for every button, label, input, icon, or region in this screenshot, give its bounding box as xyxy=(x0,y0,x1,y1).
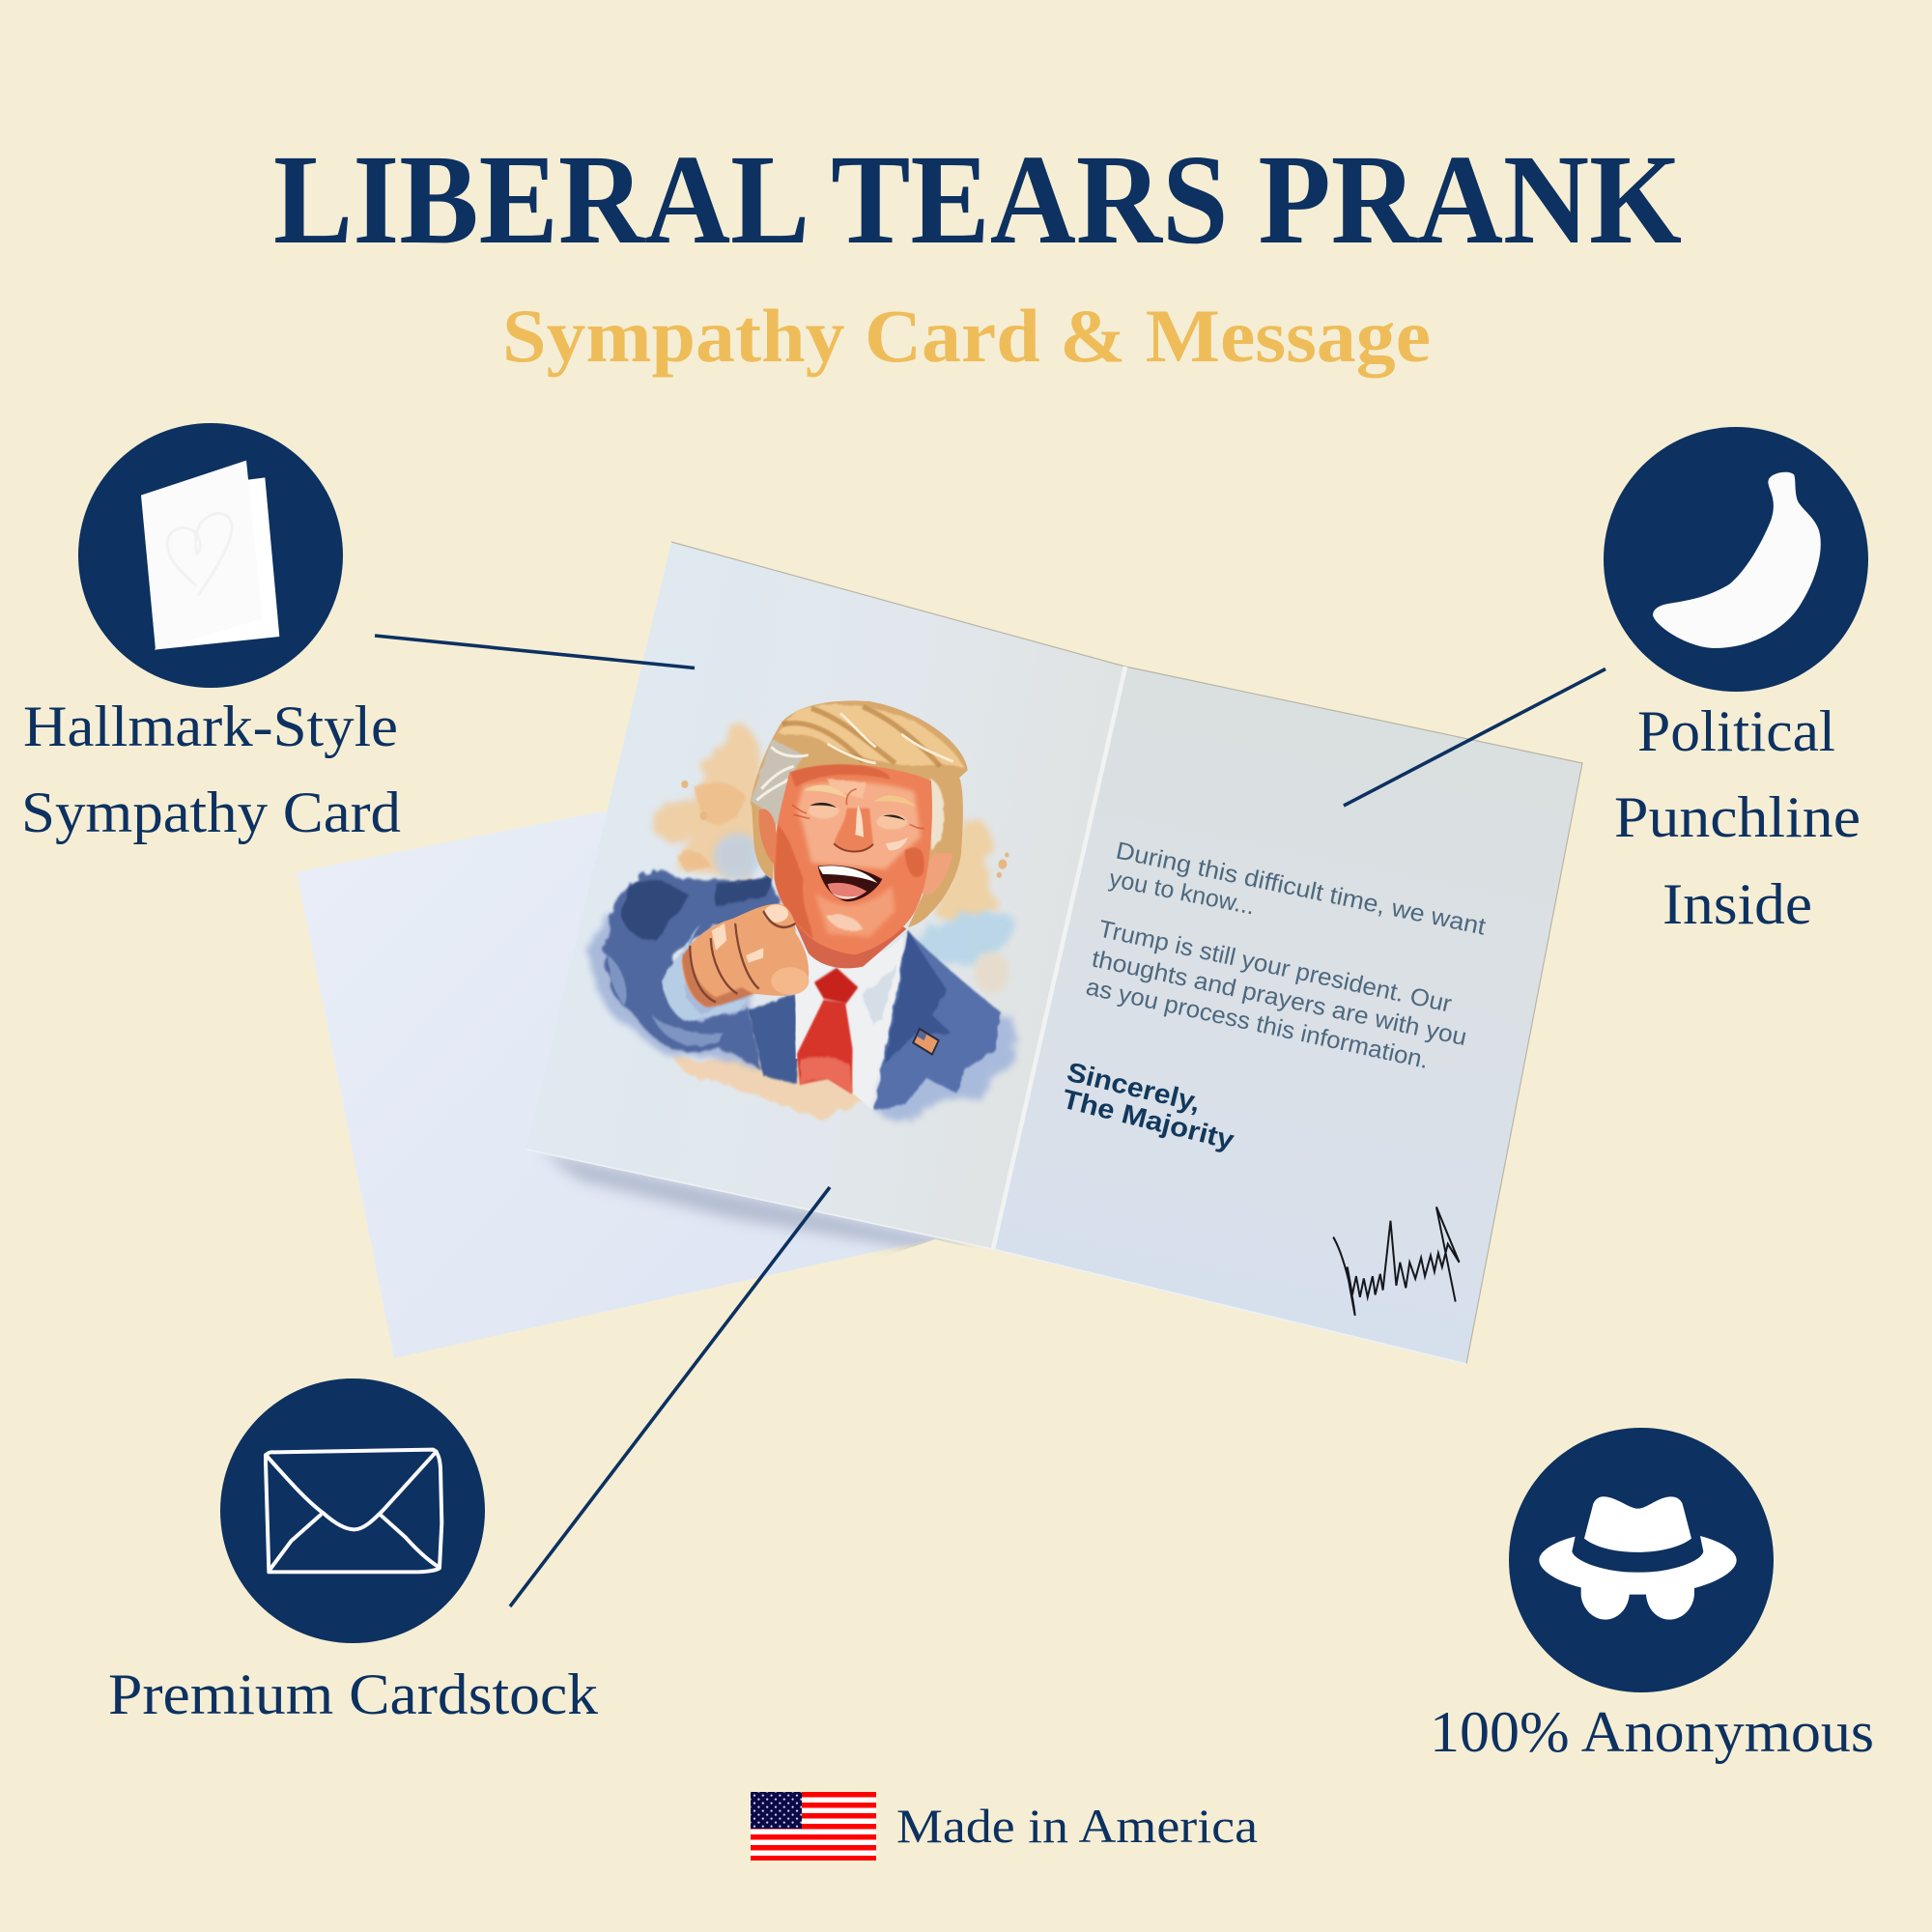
label: Hallmark-Style: Hallmark-Style xyxy=(23,695,398,758)
face light xyxy=(797,781,921,869)
label: Punchline: Punchline xyxy=(1614,785,1861,849)
envelope xyxy=(297,811,935,1358)
blue wash right xyxy=(914,912,1015,968)
card edge highlight xyxy=(671,542,1582,1364)
message line 5: as you process this information. xyxy=(1084,974,1431,1074)
lapel pin xyxy=(912,1028,940,1056)
ear left xyxy=(758,809,777,865)
jacket centre xyxy=(749,995,797,1084)
card message xyxy=(1060,837,1488,1155)
message line 1: During this difficult time, we want xyxy=(1114,837,1488,941)
photo: envelope and open card xyxy=(297,542,1582,1364)
subtitle: Sympathy Card & Message xyxy=(502,294,1431,378)
sign-off line 2: The Majority xyxy=(1060,1084,1237,1155)
teeth xyxy=(818,866,877,883)
watercolor washes and suit xyxy=(588,722,1015,1125)
nose xyxy=(834,809,873,851)
blue wash left xyxy=(714,833,761,880)
icon: envelope xyxy=(220,1378,485,1643)
label: 100% Anonymous: 100% Anonymous xyxy=(1430,1700,1874,1764)
shirt shade xyxy=(863,965,897,1024)
hand shadow xyxy=(682,946,754,1008)
message line 3: Trump is still your president. Our xyxy=(1096,915,1454,1018)
eyebrow left xyxy=(804,785,848,799)
hand base xyxy=(681,903,809,1008)
connector line: punchline xyxy=(1344,668,1605,806)
suit left arm outer wash xyxy=(588,911,759,1068)
message line 4: thoughts and prayers are with you xyxy=(1090,945,1469,1051)
lower lip highlight xyxy=(833,894,858,898)
hair grey side xyxy=(751,739,804,828)
icon: greeting card xyxy=(78,423,343,688)
signature xyxy=(1333,1207,1460,1316)
tongue xyxy=(828,883,867,899)
label: Premium Cardstock: Premium Cardstock xyxy=(108,1662,598,1726)
lower face light xyxy=(814,886,895,937)
face xyxy=(774,764,932,954)
eyebrow right xyxy=(874,795,916,807)
message line 2: you to know... xyxy=(1107,865,1257,921)
finger lines xyxy=(690,911,796,1002)
shirt cuff xyxy=(662,923,746,1022)
pale wash lower right xyxy=(974,952,1010,993)
label: Sympathy Card: Sympathy Card xyxy=(21,781,401,844)
feature: anonymous xyxy=(1430,1428,1874,1764)
clip shadow: restore background below envelope edge xyxy=(773,1239,1005,1294)
chin highlight xyxy=(826,914,863,931)
hand highlights xyxy=(712,904,788,963)
hair top highlight xyxy=(780,704,964,768)
title: LIBERAL TEARS PRANK xyxy=(273,128,1682,270)
feature: political punchline xyxy=(1604,427,1868,936)
label: Made in America: Made in America xyxy=(896,1799,1258,1853)
hair dark strands xyxy=(782,707,940,766)
grey side strands xyxy=(756,747,809,800)
orange wash right xyxy=(933,819,998,920)
feature: Hallmark-style card xyxy=(21,423,401,844)
pointing hand xyxy=(681,903,809,1008)
suit right xyxy=(874,930,1001,1111)
portrait illustration xyxy=(588,700,1015,1125)
hair back xyxy=(751,700,968,927)
tie knot xyxy=(814,968,858,1004)
suit arm shadow xyxy=(621,877,772,941)
eye patch left xyxy=(809,803,839,818)
face shadow xyxy=(775,764,924,939)
orange wash left xyxy=(650,722,760,879)
label: Inside: Inside xyxy=(1662,872,1812,936)
feature: premium cardstock xyxy=(108,1378,598,1726)
hair pale right xyxy=(930,780,944,850)
suit left arm xyxy=(604,873,781,1073)
icon: banana xyxy=(1604,427,1868,692)
connector line: cardstock xyxy=(510,1187,830,1606)
tie xyxy=(797,1000,853,1094)
orange wash bottom xyxy=(672,1051,871,1118)
label: Political: Political xyxy=(1637,699,1835,763)
card shadow on envelope xyxy=(541,1151,976,1252)
eye patch right xyxy=(876,814,907,830)
suit right outer wash xyxy=(875,1005,1015,1125)
neck xyxy=(795,908,906,968)
hair light strands xyxy=(828,713,953,763)
card bottom edge xyxy=(526,1150,1466,1364)
eye left xyxy=(810,803,837,808)
icon: US flag xyxy=(751,1792,876,1861)
head xyxy=(751,700,968,968)
tie wash xyxy=(800,1057,852,1094)
nose highlight xyxy=(855,805,864,838)
shirt xyxy=(796,936,903,1111)
card right panel xyxy=(993,667,1582,1364)
thumb xyxy=(771,967,809,995)
card fold xyxy=(993,667,1125,1249)
eye right xyxy=(883,814,905,820)
icon: spy hat and glasses xyxy=(1509,1428,1774,1692)
lapel xyxy=(884,930,952,1064)
ear right xyxy=(923,853,952,895)
wrinkles xyxy=(792,789,924,829)
mouth xyxy=(818,866,882,901)
cheek highlight xyxy=(886,838,908,850)
orange wash core xyxy=(677,782,746,871)
card left panel xyxy=(526,542,1125,1249)
connector line: card front xyxy=(375,636,695,668)
paint dots xyxy=(681,781,1009,878)
nose line xyxy=(834,843,873,852)
forehead pale xyxy=(828,780,867,799)
made in america badge xyxy=(751,1792,1258,1861)
sign-off line 1: Sincerely, xyxy=(1065,1057,1204,1118)
suit arm highlight xyxy=(608,955,724,1046)
